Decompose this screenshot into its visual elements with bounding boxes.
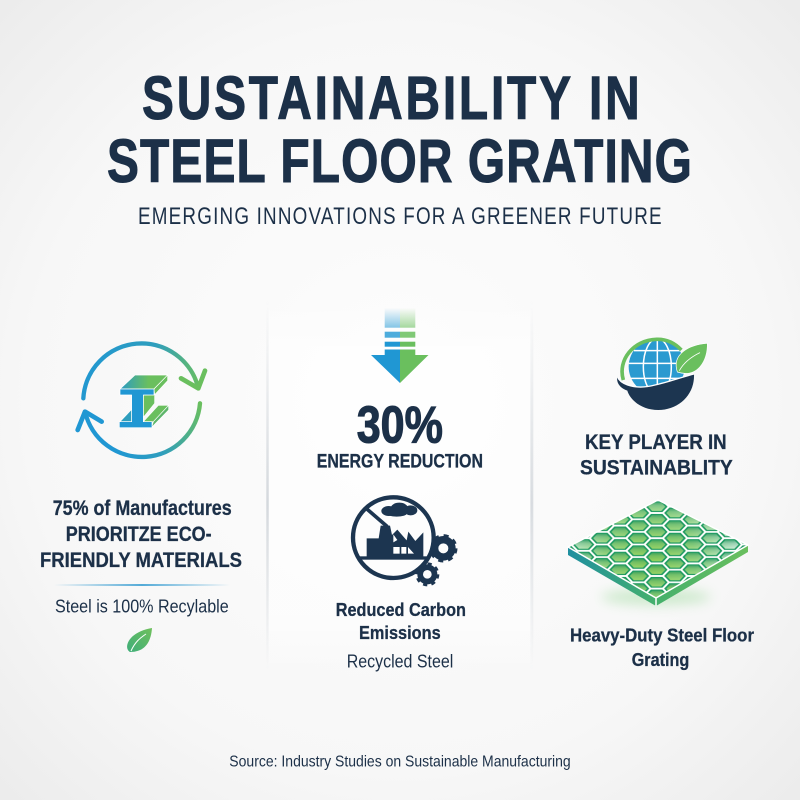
icon: leaf [127,628,152,652]
heading: manufacturers statistic: PRIORITZE ECO- [66,522,212,546]
panel: left column [40,343,242,652]
heading: manufacturers statistic [40,496,242,572]
icon: recycling arrows around steel beam [78,343,205,457]
subtitle: EMERGING INNOVATIONS FOR A GREENER FUTURE [138,202,662,230]
heading: key player: SUSTAINABLITY [580,455,733,479]
heading: key player [580,430,733,479]
heading: key player: KEY PLAYER IN [585,430,727,454]
heading: manufacturers statistic: FRIENDLY MATERIALS [40,548,242,572]
title: SUSTAINABILITY IN [142,63,640,132]
icon: down arrow [371,308,428,383]
label: reduced carbon emissions [336,599,466,643]
panel: center column [267,300,533,672]
illustration: hexagonal steel floor grating [568,500,748,606]
label: heavy-duty grating [570,625,754,670]
icon: globe with leaf [617,339,707,410]
heading: manufacturers statistic: 75% of Manufactures [53,496,232,520]
title [107,63,692,195]
stat: 30%: 30% [357,397,443,455]
title: STEEL FLOOR GRATING [107,126,692,195]
label: heavy-duty grating: Heavy-Duty Steel Floor [570,625,754,646]
label: reduced carbon emissions: Reduced Carbon [336,599,466,620]
source note: Source: Industry Studies on Sustainable Manufacturing [229,754,571,770]
text: recyclable note: Steel is 100% Recylable [55,597,229,617]
panel: right column [568,339,754,670]
text: recycled steel: Recycled Steel [347,652,453,672]
label: energy reduction: ENERGY REDUCTION [317,452,483,473]
label: heavy-duty grating: Grating [632,649,689,670]
icon: no factory with gears [353,497,456,585]
label: reduced carbon emissions: Emissions [359,622,441,643]
